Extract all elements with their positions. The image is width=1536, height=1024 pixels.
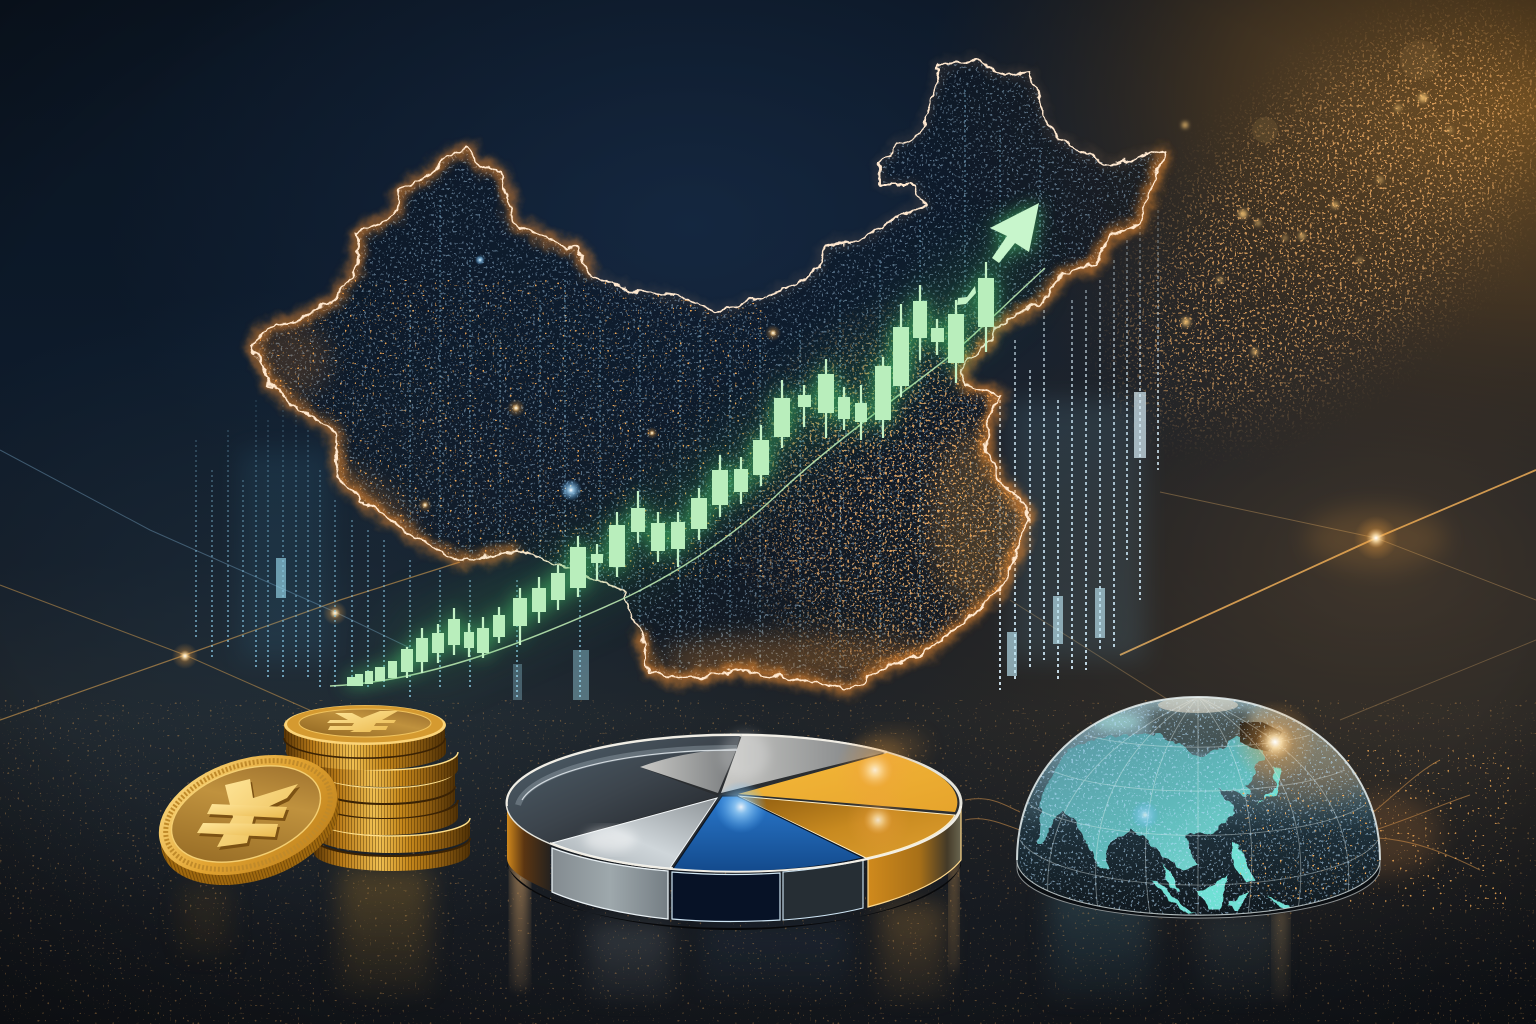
China map outline with glowing border bbox=[250, 60, 1170, 700]
floor sparkle specks bbox=[0, 700, 1536, 1024]
dome body bbox=[1017, 697, 1380, 915]
globe base bbox=[1017, 860, 1380, 918]
wedge: gray bbox=[640, 748, 737, 793]
wedge: dark gold bbox=[738, 796, 955, 858]
side: dark glass bbox=[783, 860, 863, 920]
golden particle field, upper right bbox=[1094, 0, 1536, 452]
side: gold right bbox=[868, 806, 961, 907]
flare on globe bbox=[1233, 700, 1317, 784]
grid bbox=[1017, 697, 1380, 918]
holographic globe dome bbox=[965, 697, 1510, 920]
green haze along chart bbox=[420, 270, 1000, 650]
pie glints bbox=[584, 730, 925, 852]
wedge: silver bbox=[552, 798, 717, 868]
upper right warm tint bbox=[1230, 705, 1365, 810]
map border: orange glow bbox=[253, 60, 1165, 690]
city light specks bbox=[1020, 700, 1380, 920]
green candlestick chart with rising arrow bbox=[347, 203, 1039, 686]
vertical data streaks, right bbox=[1000, 210, 1158, 690]
stack coin 5 bbox=[315, 770, 455, 803]
side: silver bbox=[552, 848, 668, 919]
side: navy bbox=[672, 872, 780, 921]
side: amber left bbox=[507, 806, 550, 891]
stack coin 6 bbox=[310, 752, 458, 787]
wedge: dark glass bbox=[507, 735, 740, 843]
stack coin 7 bbox=[286, 738, 446, 770]
Asia landmass bbox=[1038, 735, 1263, 871]
globe orange network glow bbox=[965, 750, 1510, 910]
pie rim highlight bbox=[507, 735, 961, 872]
floor reflections bbox=[180, 860, 1288, 1005]
pie base lip bbox=[507, 860, 961, 930]
stack coin 3 bbox=[312, 800, 458, 835]
wedge: light gray bbox=[721, 735, 887, 793]
floor perspective lines with star flares bbox=[0, 450, 1536, 750]
pie top rim bbox=[507, 735, 961, 871]
top coin yen mark bbox=[327, 711, 398, 732]
front coin yen mark bbox=[197, 779, 300, 850]
map city-light particles bbox=[250, 60, 1170, 700]
dome rim bbox=[1017, 697, 1380, 860]
map interior fill bbox=[253, 60, 1165, 690]
Russia dark region bbox=[1240, 722, 1282, 752]
stack coin 1 bbox=[314, 838, 470, 871]
front leaning coin bbox=[143, 734, 355, 906]
green trend curve bbox=[330, 268, 1045, 686]
top coin bbox=[284, 705, 446, 758]
gold yuan coin stack bbox=[143, 705, 470, 906]
3D glass pie chart bbox=[507, 730, 961, 930]
wedge: blue bbox=[672, 796, 863, 872]
vertical data streaks, left bbox=[196, 380, 589, 700]
stack coin 4 bbox=[315, 786, 455, 818]
candle wicks bbox=[407, 262, 986, 678]
islands bbox=[1150, 767, 1292, 914]
candle bodies bbox=[347, 278, 994, 686]
wedge: yellow bbox=[738, 753, 957, 812]
stack coin 2 bbox=[314, 818, 470, 853]
arrow head bbox=[990, 203, 1039, 263]
